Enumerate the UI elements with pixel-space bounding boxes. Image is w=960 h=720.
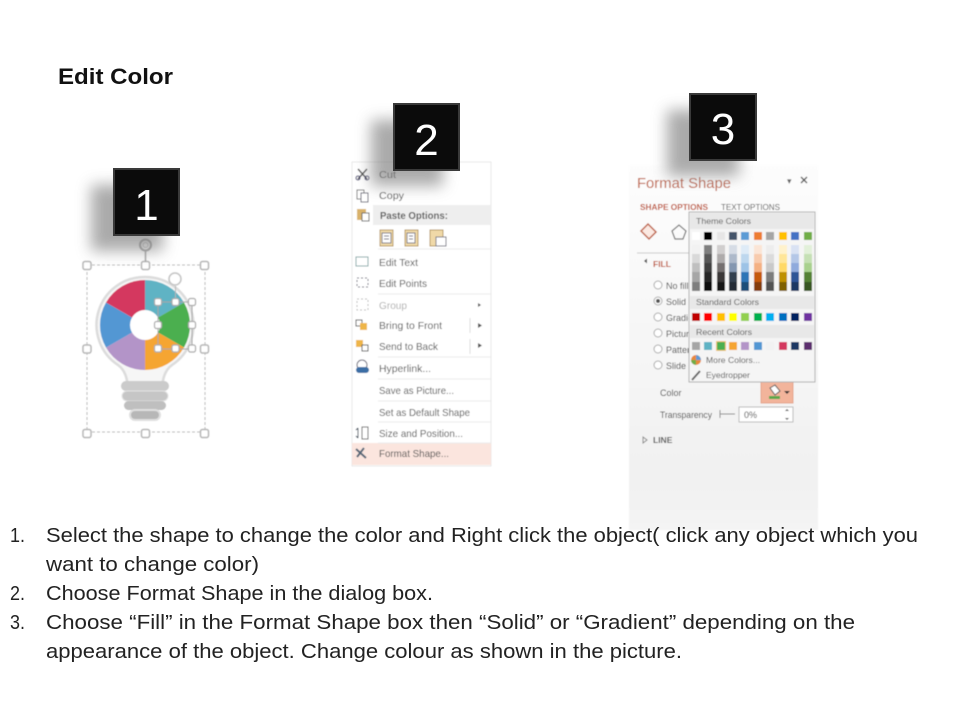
color and transparency controls [643, 382, 793, 445]
recent colour swatches [692, 341, 812, 351]
number badge 2: 2 [414, 116, 439, 165]
pane icons [637, 224, 689, 253]
menu items: Edit Text [379, 257, 418, 269]
selection box: whole bulb [83, 240, 208, 438]
title: Edit Color [58, 64, 173, 89]
fill options: No fill [666, 281, 689, 291]
menu items: Hyperlink... [379, 363, 431, 375]
number badge 3 [667, 93, 757, 176]
menu items: Format Shape... [379, 448, 449, 460]
instructions list: 2. [10, 582, 25, 605]
colour picker popup: Standard Colors [696, 297, 759, 307]
theme colour swatches [692, 232, 812, 291]
panel: step 3 format shape pane [629, 165, 818, 530]
pane tabs [640, 202, 780, 212]
icon: light bulb [97, 277, 193, 420]
fill options [644, 258, 701, 371]
instructions list: appearance of the object. Change colour as shown in the picture. [46, 640, 682, 663]
menu items: Group [379, 300, 407, 312]
panel: step 3 format shape pane: ▾ [787, 176, 792, 186]
number badge 3: 3 [711, 105, 735, 154]
fill options: Slide bg [666, 361, 699, 371]
menu items: Size and Position... [379, 428, 463, 440]
selection box: green segment [154, 273, 196, 352]
menu items: Send to Back [379, 341, 439, 353]
menu icons [356, 169, 482, 458]
number badge 1 [91, 168, 180, 251]
fill options: FILL [653, 259, 671, 269]
instructions list [10, 524, 918, 663]
colour picker popup: Eyedropper [706, 370, 750, 380]
colour picker popup: More Colors... [706, 355, 760, 365]
color and transparency controls: Color [660, 388, 682, 398]
fill options: Solid fill [666, 297, 697, 307]
instructions list: 1. [10, 524, 25, 547]
colour picker popup [689, 212, 815, 382]
menu items: Edit Points [379, 278, 427, 290]
color and transparency controls: 0% [744, 410, 757, 420]
colour picker popup: Theme Colors [696, 216, 751, 226]
standard colour swatches [692, 313, 812, 321]
instructions list: 3. [10, 611, 25, 634]
instructions list: Select the shape to change the color and Right click the object( click any object which you [46, 524, 918, 547]
menu items: Copy [379, 190, 405, 202]
color and transparency controls: LINE [653, 435, 673, 445]
menu items: Save as Picture... [379, 385, 454, 397]
instructions list: Choose “Fill” in the Format Shape box then “Solid” or “Gradient” depending on the [46, 611, 855, 634]
colour picker popup: Recent Colors [696, 327, 752, 337]
pane tabs: TEXT OPTIONS [721, 202, 780, 212]
menu items: Paste Options: [380, 210, 448, 222]
menu items [379, 169, 470, 460]
pane heading: Format Shape [637, 176, 731, 192]
panel: step 2 context menu [352, 162, 491, 466]
fill options: Pattern [666, 345, 695, 355]
fill options: Gradient [666, 313, 701, 323]
number badge 2 [371, 103, 460, 186]
menu items: Set as Default Shape [379, 407, 470, 419]
icons: more colours and eyedropper [691, 355, 701, 380]
pane tabs: SHAPE OPTIONS [640, 202, 708, 212]
panel: step 1 light bulb selection [83, 240, 208, 438]
instructions list: want to change color) [45, 553, 259, 576]
menu items: Bring to Front [379, 320, 442, 332]
fill options: Picture [666, 329, 694, 339]
instructions list: Choose Format Shape in the dialog box. [46, 582, 433, 605]
number badge 1: 1 [134, 181, 159, 230]
menu items: Cut [379, 169, 396, 181]
color and transparency controls: Transparency [660, 410, 712, 420]
